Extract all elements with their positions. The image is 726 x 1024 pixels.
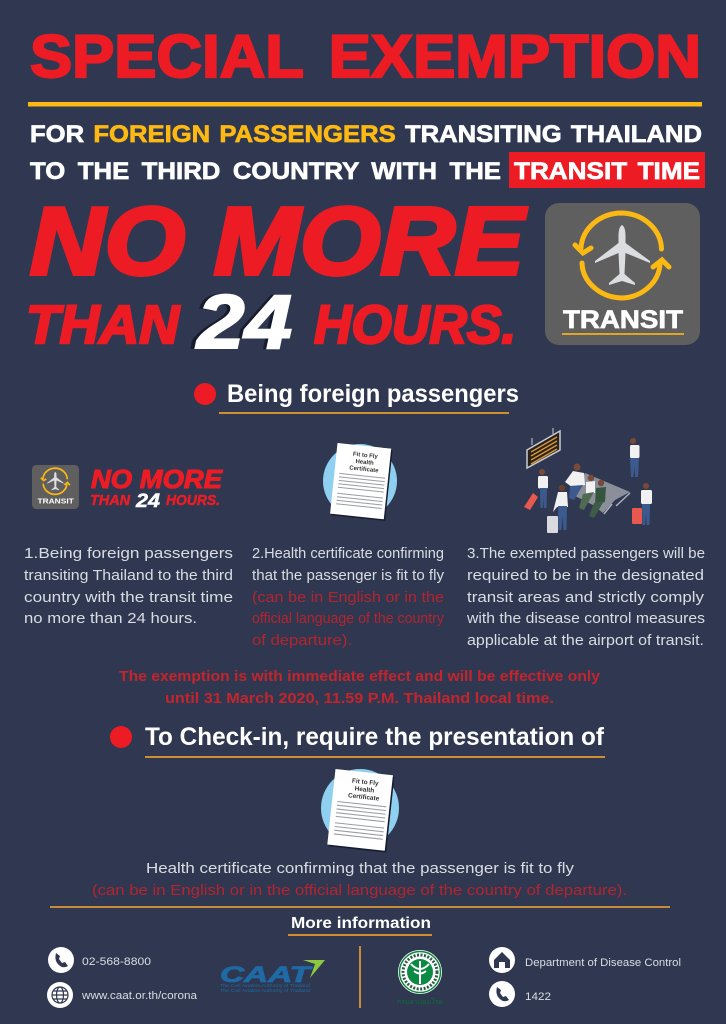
text block: item 1: transiting Thailand to the third: [24, 567, 233, 584]
text block: item 3: with the disease control measures: [466, 610, 705, 627]
icon: small transit badge and no more text: THAN: [90, 492, 131, 509]
text block: item 3: applicable at the airport of transit.: [467, 632, 704, 649]
text block: item 1: country with the transit time: [24, 589, 233, 606]
logo: CAAT: The Civil Aviation Authority of Thailand: [220, 983, 311, 988]
icon: health certificate: Fit to Fly: [353, 452, 379, 460]
text block: item 2: 2.Health certificate confirming: [252, 545, 444, 562]
flight board: [527, 428, 560, 468]
text block: item 2: (can be in English or in the: [252, 589, 444, 606]
text block: item 2: official language of the country: [252, 610, 444, 627]
seated people: [565, 464, 606, 518]
logo: ministry of public health: [397, 950, 443, 1006]
contact: CAAT website: www.caat.or.th/corona: [81, 990, 198, 1002]
text block: check-in requirement: [92, 860, 627, 899]
logo: ministry of public health: กรมควบคุมโรค: [397, 997, 443, 1006]
heading: to check-in: To Check-in, require the presentation of: [145, 723, 605, 751]
headline: no more than 24 hours: 24: [195, 280, 292, 365]
icon: health certificate: Certificate: [349, 465, 379, 474]
text block: item 3: transit areas and strictly comply: [467, 589, 705, 606]
logo: CAAT: [220, 960, 325, 993]
standing person right top: [630, 438, 640, 477]
text block: item 1: 1.Being foreign passengers: [24, 545, 233, 562]
icon: health certificate: Health: [354, 785, 375, 795]
contact: CAAT website: [47, 982, 198, 1008]
icon: small transit badge and no more text: NO MORE: [91, 464, 223, 494]
text block: item 3: required to be in the designated: [467, 567, 704, 584]
icon: small transit badge and no more text: [32, 464, 223, 512]
contact: disease control hotline: [489, 981, 551, 1007]
icon: health certificate: [321, 769, 399, 853]
text block: check-in requirement: Health certificate confirming that the passenger is fit to fly: [146, 860, 575, 877]
subtitle: TO THE THIRD COUNTRY WITH THE: [30, 158, 501, 185]
subtitle: FOR FOREIGN PASSENGERS TRANSITING THAILAND: [30, 121, 702, 148]
subtitle: TRANSIT TIME: [514, 158, 700, 185]
icon: small transit badge and no more text: TRANSIT: [37, 497, 74, 506]
headline: no more than 24 hours: [26, 188, 527, 365]
notice: effective date: The exemption is with immediate effect and will be effective only: [119, 668, 601, 685]
notice: effective date: until 31 March 2020, 11.59 P.M. Thailand local time.: [165, 690, 554, 707]
standing person right with red bag: [632, 483, 652, 525]
logo: CAAT: CAAT: [220, 962, 312, 987]
headline: no more than 24 hours: HOURS.: [314, 295, 516, 355]
headline: no more than 24 hours: NO MORE: [30, 188, 527, 295]
standing person centre with white bag: [547, 485, 568, 533]
text block: item 3: 3.The exempted passengers will be: [467, 545, 705, 562]
contact: CAAT phone: [48, 947, 151, 973]
text block: item 2: that the passenger is fit to fly: [252, 567, 445, 584]
headline: no more than 24 hours: THAN: [26, 295, 180, 355]
headline: no more than 24 hours: 24: [191, 280, 289, 365]
text block: item 1: [24, 545, 233, 627]
contact: disease control home: [489, 947, 681, 973]
text block: check-in requirement: (can be in English or in the official language of the country of departure).: [92, 882, 627, 899]
icon: health certificate: Health: [355, 459, 374, 467]
text block: item 2: [252, 545, 445, 649]
contact: CAAT phone: 02-568-8800: [82, 956, 151, 968]
heading: being foreign passengers: Being foreign passengers: [227, 380, 519, 408]
logo: CAAT: The Civil Aviation Authority of Thailand: [220, 988, 311, 993]
icon: health certificate: Certificate: [348, 792, 380, 803]
illustration: passengers waiting at airport: [524, 428, 652, 533]
title: SPECIAL EXEMPTION: [30, 23, 701, 90]
standing person left with red bag: [524, 469, 548, 510]
subtitle: [30, 121, 705, 188]
icon: transit badge: TRANSIT: [563, 306, 683, 334]
icon: small transit badge and no more text: HOURS.: [166, 492, 220, 509]
seats: [573, 473, 630, 514]
icon: health certificate: [323, 443, 397, 521]
icon: small transit badge and no more text: 24: [135, 491, 160, 512]
text block: item 2: of departure).: [252, 632, 352, 649]
heading: more information: More information: [291, 915, 431, 932]
contact: disease control home: Department of Disease Control: [525, 957, 681, 969]
icon: transit badge: [545, 203, 700, 345]
text block: item 1: no more than 24 hours.: [24, 610, 197, 627]
text block: item 3: [466, 545, 705, 649]
icon: health certificate: Fit to Fly: [352, 778, 379, 788]
contact: disease control hotline: 1422: [525, 991, 551, 1003]
notice: effective date: [119, 668, 601, 707]
